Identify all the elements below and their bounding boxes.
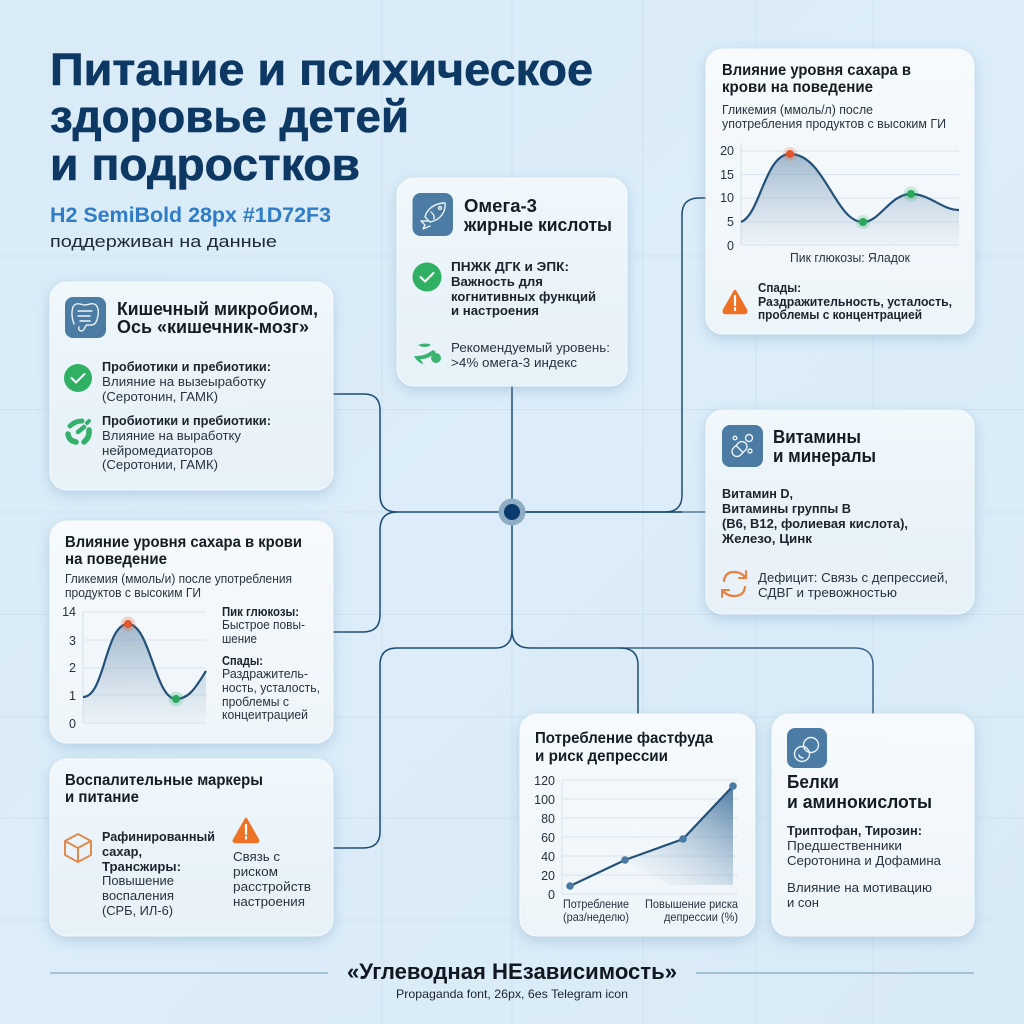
line chart: 1 [69, 689, 76, 703]
heading [773, 426, 876, 466]
x-axis labels: (раз/неделю) [563, 910, 629, 924]
icon: intestine [65, 297, 106, 338]
line chart: 20 [541, 869, 555, 883]
title: здоровье детей [50, 91, 409, 142]
icon: cube [65, 834, 91, 862]
line chart: 5 [727, 215, 734, 229]
text: recommended level: >4% омега-3 индекс [451, 355, 577, 370]
text: vitamin list: Витамины группы В [722, 501, 851, 516]
text: precursors [787, 823, 942, 868]
heading: Кишечный микробиом, [117, 298, 318, 319]
text: probiotics 2 [102, 413, 271, 472]
line chart: 20 [720, 144, 734, 158]
heading: Омега-3 [464, 195, 537, 216]
chart description: употребления продуктов с высоким ГИ [722, 116, 946, 131]
icon: warning [724, 291, 746, 313]
heading [787, 771, 932, 812]
heading: крови на поведение [722, 79, 873, 96]
text: refined sugar: Рафинированный [102, 829, 215, 844]
x-axis labels: Повышение риска [645, 897, 738, 911]
line chart: 0 [548, 888, 555, 902]
chart caption: Пик глюкозы: Яладок [790, 251, 911, 265]
text: deficiency [758, 570, 948, 600]
chart description [65, 571, 292, 600]
heading: Ось «кишечник-мозг» [117, 316, 309, 337]
line chart [62, 605, 206, 731]
icon: leaves [414, 344, 441, 364]
footer [347, 959, 677, 1001]
heading: Влияние уровня сахара в крови [65, 534, 302, 551]
text: mood disorders: риском [233, 864, 278, 879]
text: PUFA: Важность для [451, 274, 543, 289]
text: mood disorders [233, 849, 311, 909]
line chart: 0 [69, 717, 76, 731]
icon: refresh arrows [722, 571, 746, 597]
x-axis labels [563, 897, 738, 924]
line chart: 120 [534, 774, 555, 788]
panel: fast food [520, 714, 755, 936]
x-axis labels: депрессии (%) [664, 910, 738, 924]
text: dips: Спады: [758, 280, 801, 295]
text: dips: Спады: [222, 653, 263, 668]
heading [722, 62, 911, 96]
line chart: 100 [534, 793, 555, 807]
heading [463, 195, 612, 235]
text: dips: проблемы с концентрацией [758, 307, 922, 322]
heading [117, 298, 318, 337]
line chart: 10 [720, 191, 734, 205]
line chart [534, 774, 738, 902]
panel: blood sugar left [50, 521, 333, 743]
text: deficiency: Дефицит: Связь с депрессией, [758, 570, 948, 585]
text: vitamin list: Железо, Цинк [721, 531, 812, 546]
heading: Воспалительные маркеры [65, 772, 263, 789]
heading: жирные кислоты [463, 214, 612, 235]
text: dips: ность, усталость, [222, 680, 320, 695]
title: и подростков [50, 139, 360, 190]
title [50, 44, 593, 190]
footer: Propaganda font, 26px, 6es Telegram icon [396, 987, 628, 1001]
subtitle: H2 SemiBold 28px #1D72F3 [50, 204, 331, 227]
chart description: Гликемия (ммоль/и) после употребления [65, 571, 292, 586]
heading: и аминокислоты [787, 791, 932, 812]
panel: vitamins [706, 410, 974, 614]
text: dips [222, 653, 320, 722]
text: PUFA [451, 259, 596, 318]
text: vitamin list: Витамин D, [722, 486, 793, 501]
text: dips: проблемы с [222, 694, 289, 709]
heading: Потребление фастфуда [535, 730, 713, 747]
text: mood disorders: настроения [233, 894, 305, 909]
heading: и минералы [773, 445, 876, 466]
heading: Белки [787, 771, 839, 792]
central hub node [498, 498, 526, 526]
text: precursors: Серотонина и Дофамина [787, 853, 942, 868]
heading [65, 772, 263, 806]
icon: check [64, 364, 92, 392]
text: refined sugar: Трансжиры: [102, 859, 181, 874]
text: PUFA: когнитивных функций [451, 289, 596, 304]
text: probiotics 2: нейромедиаторов [102, 443, 213, 458]
line chart: 3 [69, 634, 76, 648]
icon: pills [722, 425, 763, 467]
heading: на поведение [65, 551, 167, 568]
text: glucose peak: Пик глюкозы: [222, 604, 299, 619]
icon: fish [412, 193, 453, 236]
chart description: продуктов с высоким ГИ [65, 585, 201, 600]
line chart: 15 [720, 168, 734, 182]
text: dips: Раздражитель- [222, 666, 308, 681]
icon: amino acids [787, 728, 827, 768]
text: mood disorders: расстройств [233, 879, 311, 894]
text: probiotics 2: Пробиотики и пребиотики: [102, 413, 271, 428]
text: mood disorders: Связь с [233, 849, 280, 864]
icon: bacteria [68, 421, 89, 442]
text: probiotics 1 [102, 359, 271, 404]
subtitle: поддерживан на данные [50, 232, 277, 251]
connector lines [333, 198, 873, 848]
panel: omega-3 [397, 178, 627, 386]
text: precursors: Триптофан, Тирозин: [787, 823, 922, 838]
text: vitamin list [721, 486, 908, 546]
text: precursors: Предшественники [787, 838, 902, 853]
text: glucose peak: шение [222, 631, 257, 646]
chart description [722, 102, 946, 131]
text: recommended level: Рекомендуемый уровень: [451, 340, 610, 355]
chart description: Гликемия (ммоль/л) после [722, 102, 873, 117]
line chart: 40 [541, 850, 555, 864]
heading: Витамины [773, 426, 861, 447]
text: glucose peak: Быстрое повы- [222, 617, 305, 632]
text: motivation [787, 880, 932, 910]
line chart: 14 [62, 605, 76, 619]
text: dips: концеитрацией [222, 707, 308, 722]
x-axis labels: Потребление [563, 897, 629, 911]
footer: «Углеводная НЕзависимость» [347, 959, 677, 984]
text: motivation: и сон [787, 895, 819, 910]
panel: gut microbiome [50, 282, 333, 490]
text: probiotics 2: (Серотонии, ГАМК) [102, 457, 218, 472]
line chart: 0 [727, 239, 734, 253]
text: probiotics 2: Влияние на выработку [102, 428, 241, 443]
text: dips [758, 280, 952, 322]
text: refined sugar: воспаления [102, 888, 174, 903]
subtitle [50, 204, 331, 251]
text: PUFA: ПНЖК ДГК и ЭПК: [451, 259, 569, 274]
text: probiotics 1: (Серотонин, ГАМК) [102, 389, 218, 404]
text: vitamin list: (В6, В12, фолиевая кислота), [722, 516, 908, 531]
panel: proteins [772, 714, 974, 936]
text: probiotics 1: Пробиотики и пребиотики: [102, 359, 271, 374]
text: PUFA: и настроения [451, 303, 539, 318]
line chart [720, 143, 959, 253]
panel: blood sugar top right [706, 49, 974, 334]
heading: и риск депрессии [535, 748, 668, 765]
title: Питание и психическое [50, 44, 593, 95]
text: refined sugar [102, 829, 215, 918]
text: recommended level [451, 340, 610, 370]
text: refined sugar: (СРБ, ИЛ-6) [102, 903, 173, 918]
icon: warning [234, 819, 258, 842]
heading: и питание [65, 789, 139, 806]
heading [535, 730, 713, 765]
line chart: 2 [69, 661, 76, 675]
text: probiotics 1: Влияние на вызеыработку [102, 374, 266, 389]
text: glucose peak [222, 604, 305, 646]
line chart: 60 [541, 831, 555, 845]
panel: inflammatory markers [50, 759, 333, 936]
heading: Влияние уровня сахара в [722, 62, 911, 79]
text: dips: Раздражительность, усталость, [758, 294, 952, 309]
icon: check [412, 262, 442, 292]
text: refined sugar: Повышение [102, 873, 174, 888]
text: refined sugar: сахар, [102, 844, 142, 859]
text: motivation: Влияние на мотивацию [787, 880, 932, 895]
text: deficiency: СДВГ и тревожностью [758, 585, 897, 600]
heading [65, 534, 302, 568]
line chart: 80 [541, 812, 555, 826]
